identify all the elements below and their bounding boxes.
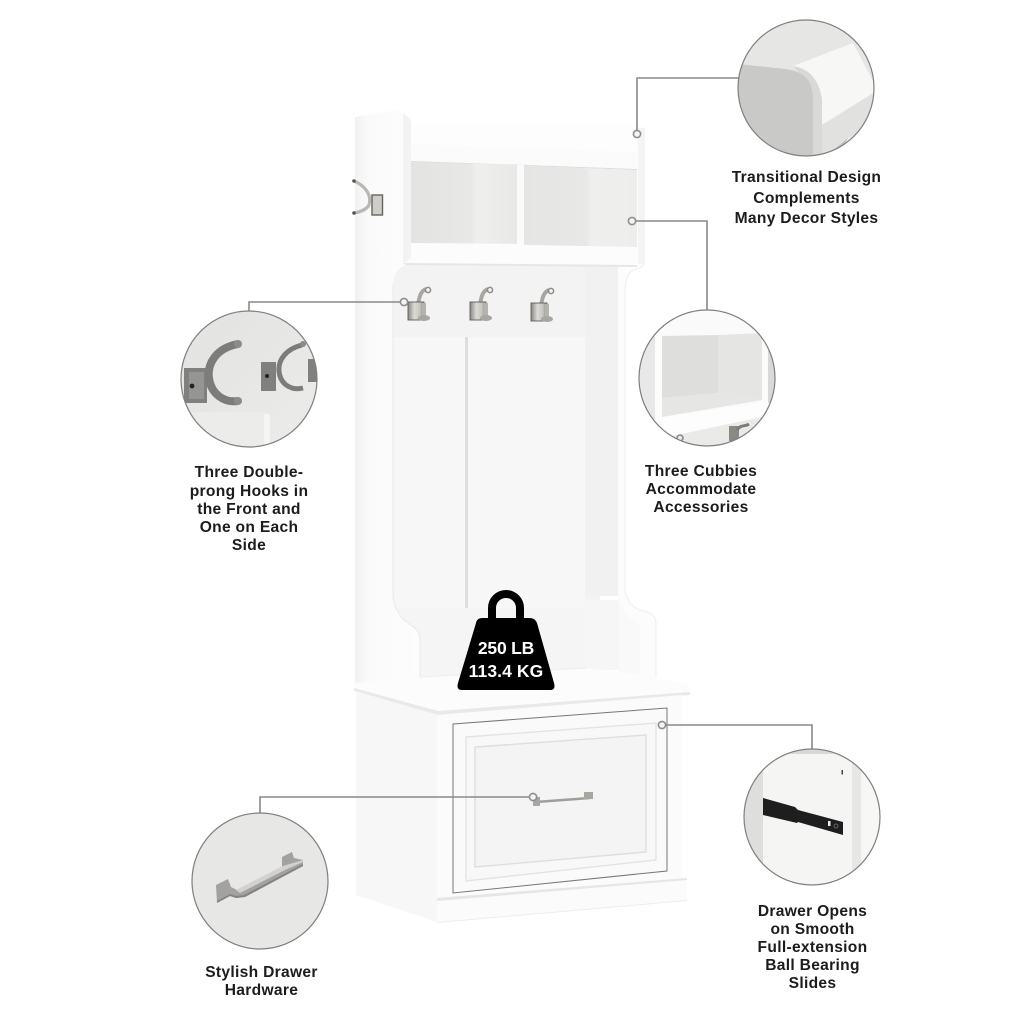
cubby right bbox=[524, 166, 637, 247]
front hook 3 bbox=[531, 288, 554, 322]
upper back and top board bbox=[411, 125, 637, 152]
bench top bbox=[354, 668, 690, 711]
back panel bbox=[393, 264, 600, 680]
weight in kilograms: 113.4 KG bbox=[469, 661, 543, 681]
front hook 2 bbox=[470, 287, 493, 321]
label: on Smooth bbox=[770, 921, 855, 938]
detail circle: rounded corner bbox=[738, 20, 875, 157]
label: Accessories bbox=[653, 499, 749, 516]
label: Full-extension bbox=[758, 939, 867, 956]
callout: drawer hardware bbox=[192, 793, 537, 999]
label: Transitional Design bbox=[732, 169, 881, 186]
front hook 1 bbox=[408, 287, 431, 321]
detail circle: handle bbox=[192, 813, 329, 950]
weight capacity icon bbox=[458, 594, 554, 690]
label: Hardware bbox=[225, 982, 298, 999]
label: Slides bbox=[789, 975, 836, 992]
callout: drawer slides bbox=[658, 721, 881, 992]
side hook bbox=[352, 179, 382, 215]
detail circle: slides bbox=[744, 749, 881, 886]
cabinet side bbox=[356, 691, 437, 922]
left side panel bbox=[355, 110, 420, 684]
label: Accommodate bbox=[646, 481, 756, 498]
drawer handle bbox=[533, 792, 593, 806]
weight in pounds: 250 LB bbox=[478, 638, 534, 658]
cabinet front bbox=[437, 695, 682, 898]
label: Three Cubbies bbox=[645, 463, 757, 480]
label: prong Hooks in bbox=[190, 483, 308, 500]
label: Side bbox=[232, 537, 266, 554]
right side panel bbox=[618, 125, 656, 682]
label: Complements bbox=[753, 190, 860, 207]
detail circle: hooks bbox=[180, 311, 318, 448]
drawer front bbox=[453, 708, 667, 893]
callout: cubbies bbox=[628, 217, 776, 516]
label: Many Decor Styles bbox=[735, 210, 878, 227]
label: Drawer Opens bbox=[758, 903, 867, 920]
cubby divider bbox=[517, 165, 524, 245]
label: Three Double- bbox=[195, 464, 303, 481]
callout: hooks bbox=[180, 298, 408, 554]
label: One on Each bbox=[200, 519, 298, 536]
plinth bbox=[437, 878, 687, 922]
label: the Front and bbox=[197, 501, 301, 518]
label: Stylish Drawer bbox=[205, 964, 318, 981]
callout: transitional design bbox=[633, 20, 881, 227]
detail circle: cubby bbox=[639, 310, 776, 447]
top cubby shelf bbox=[411, 144, 637, 169]
label: Ball Bearing bbox=[765, 957, 860, 974]
lower cubby shelf bbox=[405, 243, 637, 265]
cubby left bbox=[411, 162, 517, 244]
hall tree furniture bbox=[352, 110, 690, 923]
